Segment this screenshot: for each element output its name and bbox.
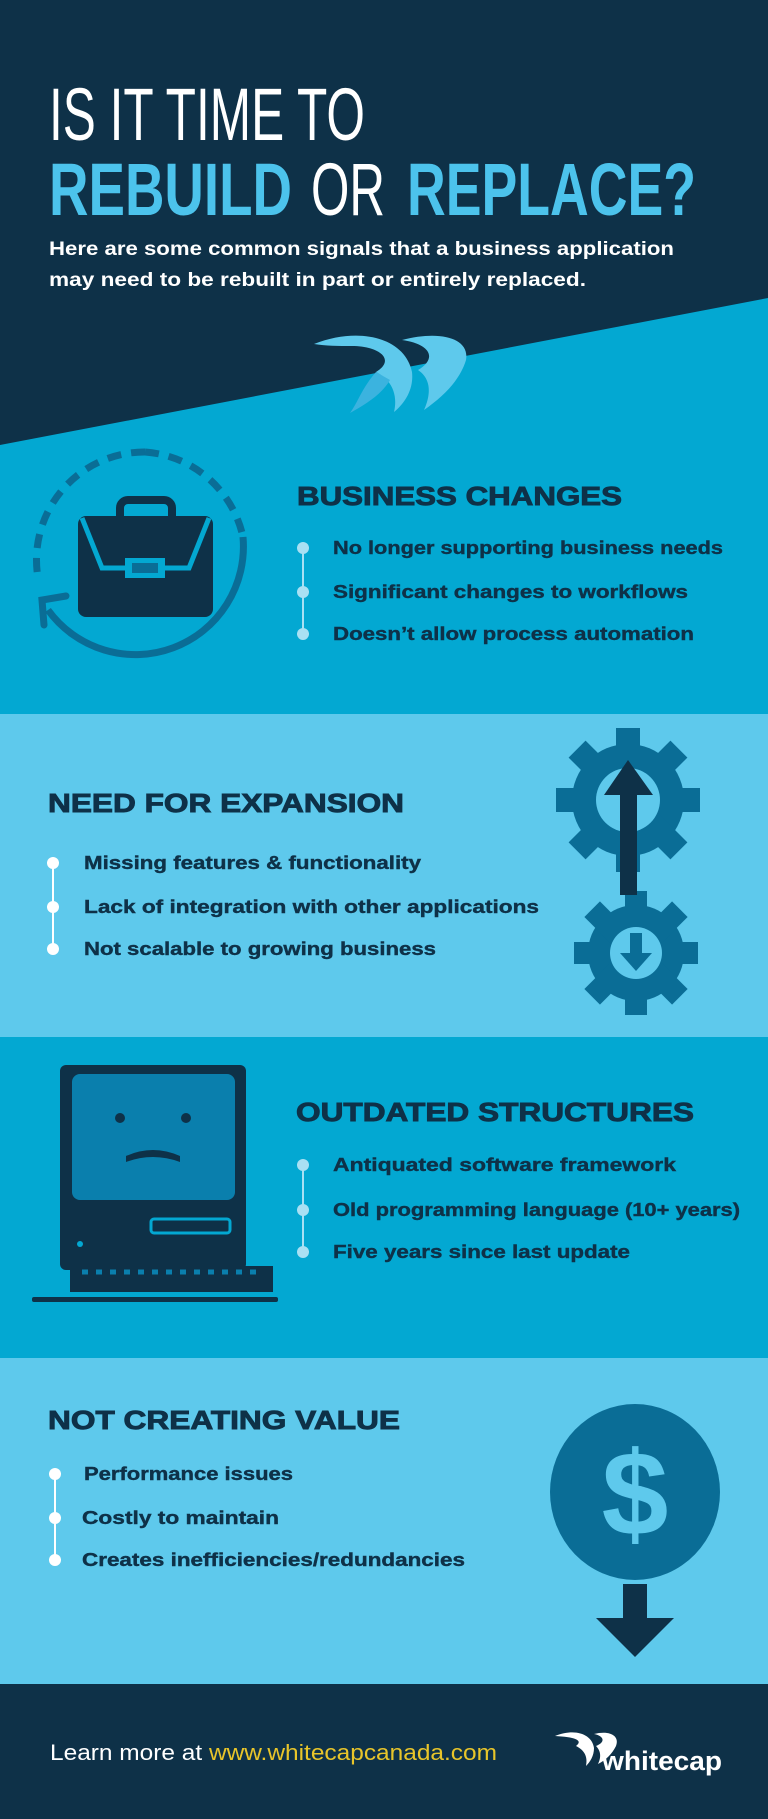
icon: coin with down arrow: $ [602, 1427, 668, 1561]
heading: business changes: BUSINESS CHANGES [297, 481, 622, 511]
footer text: Learn more at www.whitecapcanada.com [50, 1740, 497, 1765]
heading: outdated structures: OUTDATED STRUCTURES [296, 1097, 694, 1127]
title: OR [311, 148, 385, 231]
footer [50, 1732, 722, 1776]
title: IS IT TIME TO [49, 73, 365, 156]
subtitle: Here are some common signals that a business application [49, 239, 674, 260]
panel: business changes [36, 452, 723, 655]
icon: footer logo [555, 1732, 722, 1776]
bullet list: not creating value [49, 1464, 465, 1570]
bullet list: business changes: Significant changes to workflows [333, 582, 688, 602]
title [49, 73, 696, 231]
title: REBUILD [49, 148, 292, 231]
bullet list: outdated structures: Antiquated software framework [333, 1155, 677, 1175]
icon: briefcase with cycle arrow [36, 452, 243, 655]
bullet list: business changes [297, 538, 723, 644]
subtitle: may need to be rebuilt in part or entirely replaced. [49, 270, 586, 291]
bullet list: not creating value: Creates inefficiencies/redundancies [82, 1550, 465, 1570]
bullet list: need for expansion: Missing features & functionality [84, 853, 421, 873]
bullet list: need for expansion: Lack of integration with other applications [84, 897, 539, 917]
bullet list: outdated structures: Old programming language (10+ years) [333, 1200, 740, 1220]
icon: footer logo: whitecap [601, 1746, 722, 1776]
bullet list: outdated structures [297, 1155, 740, 1262]
icon: coin with down arrow [550, 1404, 720, 1657]
bullet list: business changes: No longer supporting business needs [333, 538, 723, 558]
heading: not creating value: NOT CREATING VALUE [48, 1405, 400, 1435]
icon: gears with arrows [556, 728, 700, 1015]
bullet list: business changes: Doesn’t allow process automation [333, 624, 694, 644]
bullet list: need for expansion: Not scalable to growing business [84, 939, 436, 959]
bullet list: need for expansion [47, 853, 539, 959]
subtitle [49, 239, 674, 291]
heading: need for expansion: NEED FOR EXPANSION [48, 788, 404, 818]
panel: need for expansion [47, 728, 700, 1015]
icon: whitecap logo mark [314, 336, 466, 413]
bullet list: outdated structures: Five years since last update [333, 1242, 630, 1262]
bullet list: not creating value: Performance issues [84, 1464, 293, 1484]
panel: outdated structures [32, 1065, 740, 1302]
icon: sad computer [32, 1065, 278, 1302]
panel: not creating value [48, 1404, 720, 1657]
bullet list: not creating value: Costly to maintain [82, 1508, 279, 1528]
